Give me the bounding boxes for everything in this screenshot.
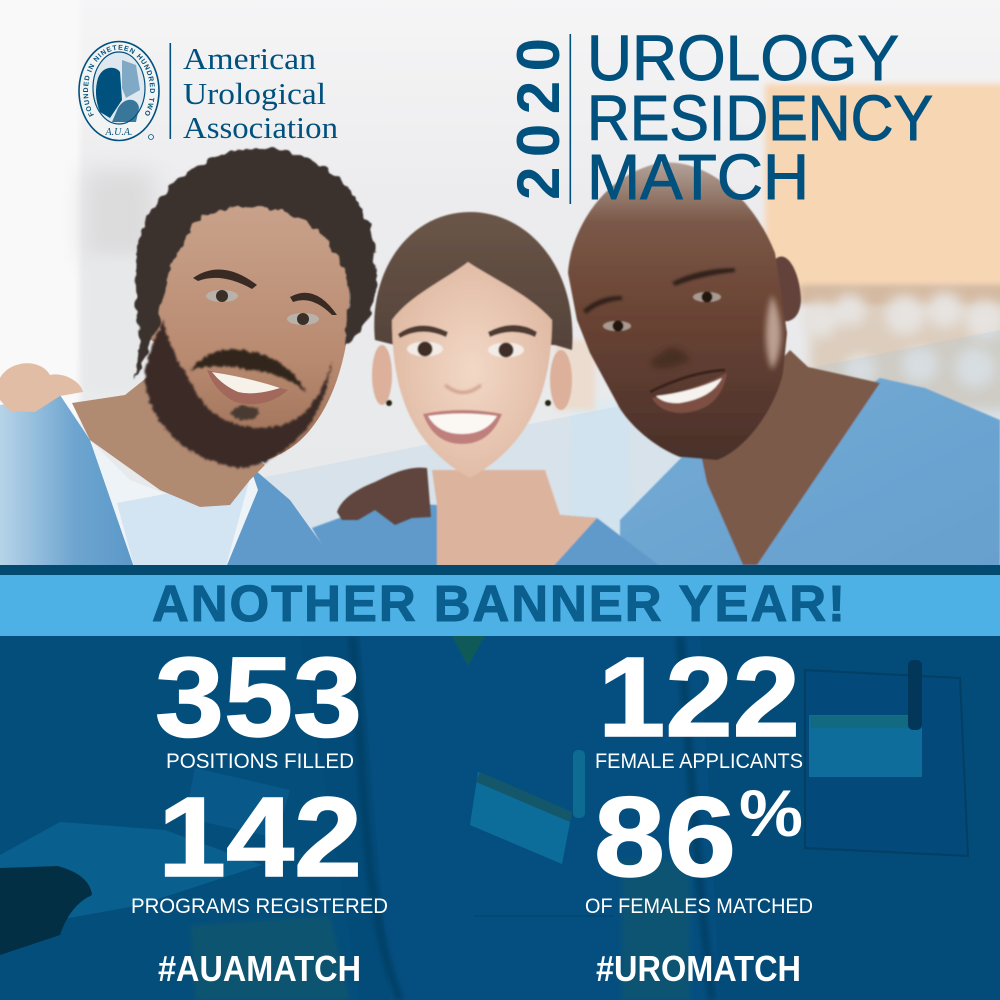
logo: American Urological Association — [78, 40, 338, 145]
wordmark — [183, 42, 338, 145]
photo: blurred hospital background — [0, 0, 1000, 580]
wordmark: Association — [183, 111, 338, 145]
icon: seal — [78, 40, 160, 142]
banner: another banner year — [0, 575, 1000, 636]
heading lines: RESIDENCY — [587, 82, 933, 154]
stat: female applicants: 122 — [598, 634, 800, 760]
photo: hand on the woman's shoulder — [337, 468, 431, 525]
photo: translucent diagonal overlay — [0, 330, 1000, 570]
wordmark: American — [183, 42, 316, 76]
photo: man on the right — [568, 162, 1000, 570]
stat: positions filled: 353 — [155, 634, 362, 760]
stat: programs registered — [131, 774, 388, 918]
heading lines: UROLOGY — [587, 22, 899, 94]
icon: seal: FOUNDED IN NINETEEN HUNDRED TWO — [83, 44, 155, 117]
photo: man on the left — [0, 148, 377, 570]
heading lines: MATCH — [587, 141, 809, 213]
stat: percent of females matched: 86 — [594, 774, 736, 900]
heading lines — [587, 22, 933, 213]
stat: percent of females matched: OF FEMALES MATCHED — [585, 895, 813, 918]
hashtag: auamatch: #AUAMATCH — [158, 948, 361, 989]
year, rotated: 2020 — [505, 38, 572, 200]
stat: female applicants: FEMALE APPLICANTS — [595, 750, 803, 773]
photo: woman in the centre — [312, 212, 665, 570]
lower panel: tinted photo of scrubs — [0, 565, 1000, 1000]
stat: percent of females matched — [585, 774, 813, 918]
icon: seal: A.U.A. — [105, 127, 132, 138]
banner: another banner year: ANOTHER BANNER YEAR! — [152, 575, 845, 632]
hashtag: uromatch: #UROMATCH — [596, 948, 801, 989]
stat: programs registered: 142 — [158, 774, 362, 900]
stat: percent of females matched: % — [739, 776, 803, 850]
wordmark: Urological — [183, 77, 326, 111]
title: 2020 Urology Residency Match — [505, 22, 933, 213]
stat: positions filled: POSITIONS FILLED — [166, 750, 354, 773]
stat: programs registered: PROGRAMS REGISTERED — [131, 895, 388, 918]
